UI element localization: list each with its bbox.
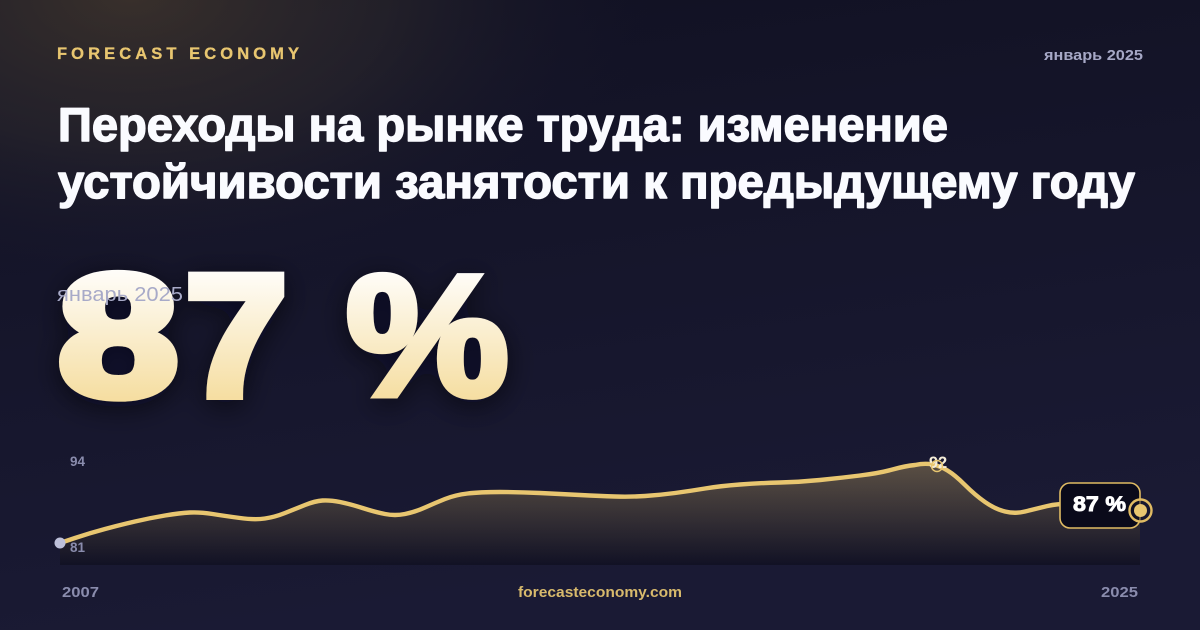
brand label: FORECAST ECONOMY	[57, 45, 299, 63]
peak marker	[932, 460, 942, 472]
axis label: min: 81	[70, 540, 86, 555]
title: устойчивости занятости к предыдущему году	[58, 155, 1135, 208]
line chart	[54, 454, 1152, 565]
title: Переходы на рынке труда: изменение	[58, 98, 948, 151]
end point marker	[1130, 500, 1152, 522]
source url: forecasteconomy.com	[518, 585, 682, 601]
peak label: 92	[929, 454, 947, 472]
start point	[54, 538, 66, 548]
date top right: январь 2025	[1044, 47, 1143, 64]
hero value	[58, 239, 509, 432]
hero value: 7	[186, 240, 287, 432]
callout: 87 %	[1073, 493, 1126, 516]
chart line	[60, 464, 1140, 543]
title	[58, 98, 1135, 208]
chart area fill	[60, 464, 1140, 565]
hero value: %	[346, 239, 509, 432]
hero value: 8	[58, 240, 178, 432]
start year: 2007	[62, 585, 99, 601]
axis label: max: 94	[70, 454, 86, 469]
hero date label: январь 2025	[57, 284, 183, 306]
end year: 2025	[1101, 585, 1138, 601]
callout	[1060, 483, 1140, 528]
